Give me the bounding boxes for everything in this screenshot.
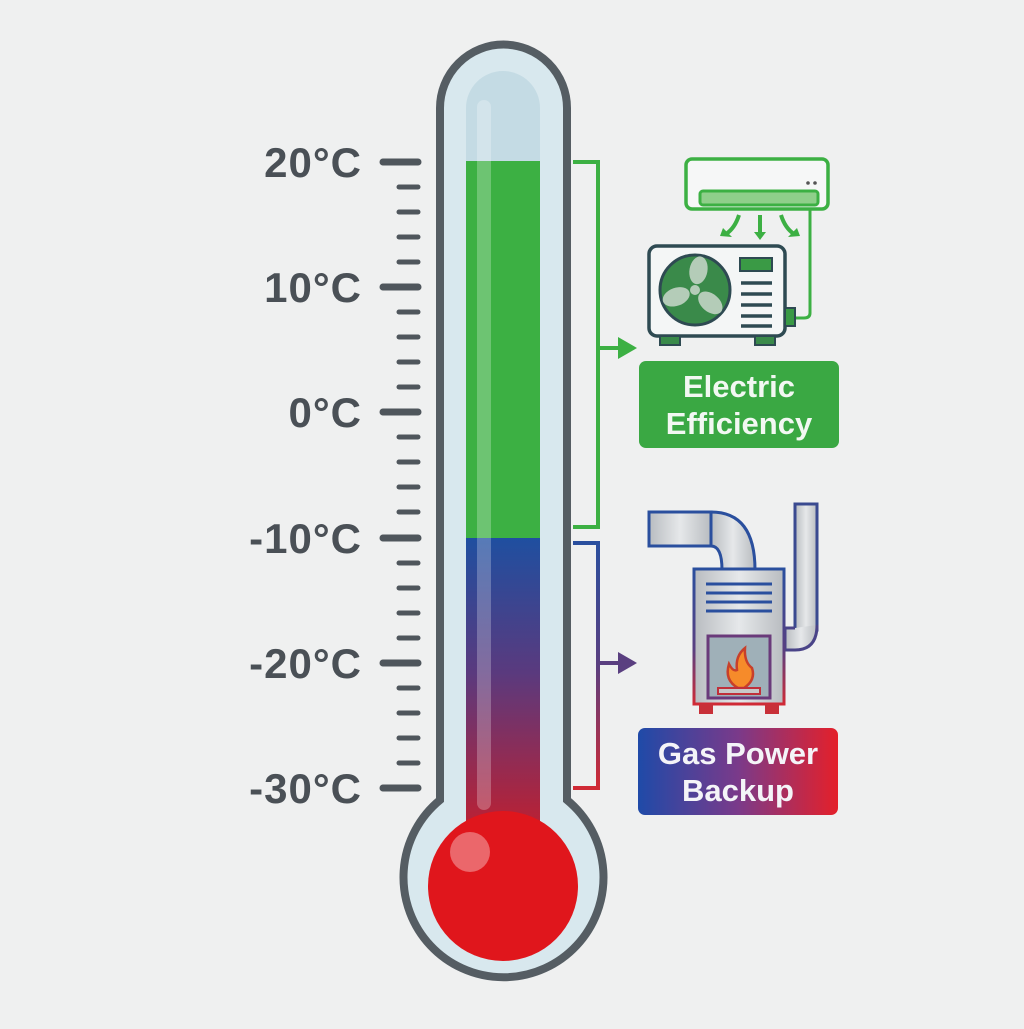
label: Gas Power Backup: Backup: [682, 773, 794, 808]
temperature labels: 20°C: [264, 139, 362, 186]
label: Electric Efficiency: Electric: [683, 369, 795, 404]
temperature labels: -30°C: [249, 765, 362, 812]
temperature labels: 0°C: [288, 389, 362, 436]
icon: gas furnace: [649, 504, 817, 714]
bulb: [428, 811, 578, 961]
temperature labels: 10°C: [264, 264, 362, 311]
label: Electric Efficiency: Efficiency: [666, 406, 813, 441]
label: Gas Power Backup: [638, 728, 838, 815]
temperature labels: [249, 139, 362, 812]
blue-red fill (cold range): [466, 538, 540, 838]
bracket: warm range: [573, 162, 637, 527]
label: Gas Power Backup: Gas Power: [658, 736, 818, 771]
icon: heat pump: [649, 159, 828, 345]
thermometer: [403, 45, 604, 977]
temperature labels: -20°C: [249, 640, 362, 687]
green fill (warm range): [466, 161, 540, 539]
label: Electric Efficiency: [639, 361, 839, 448]
scale ticks: [383, 162, 418, 788]
temperature labels: -10°C: [249, 515, 362, 562]
bracket: cold range: [573, 543, 637, 788]
empty column: [466, 71, 540, 162]
